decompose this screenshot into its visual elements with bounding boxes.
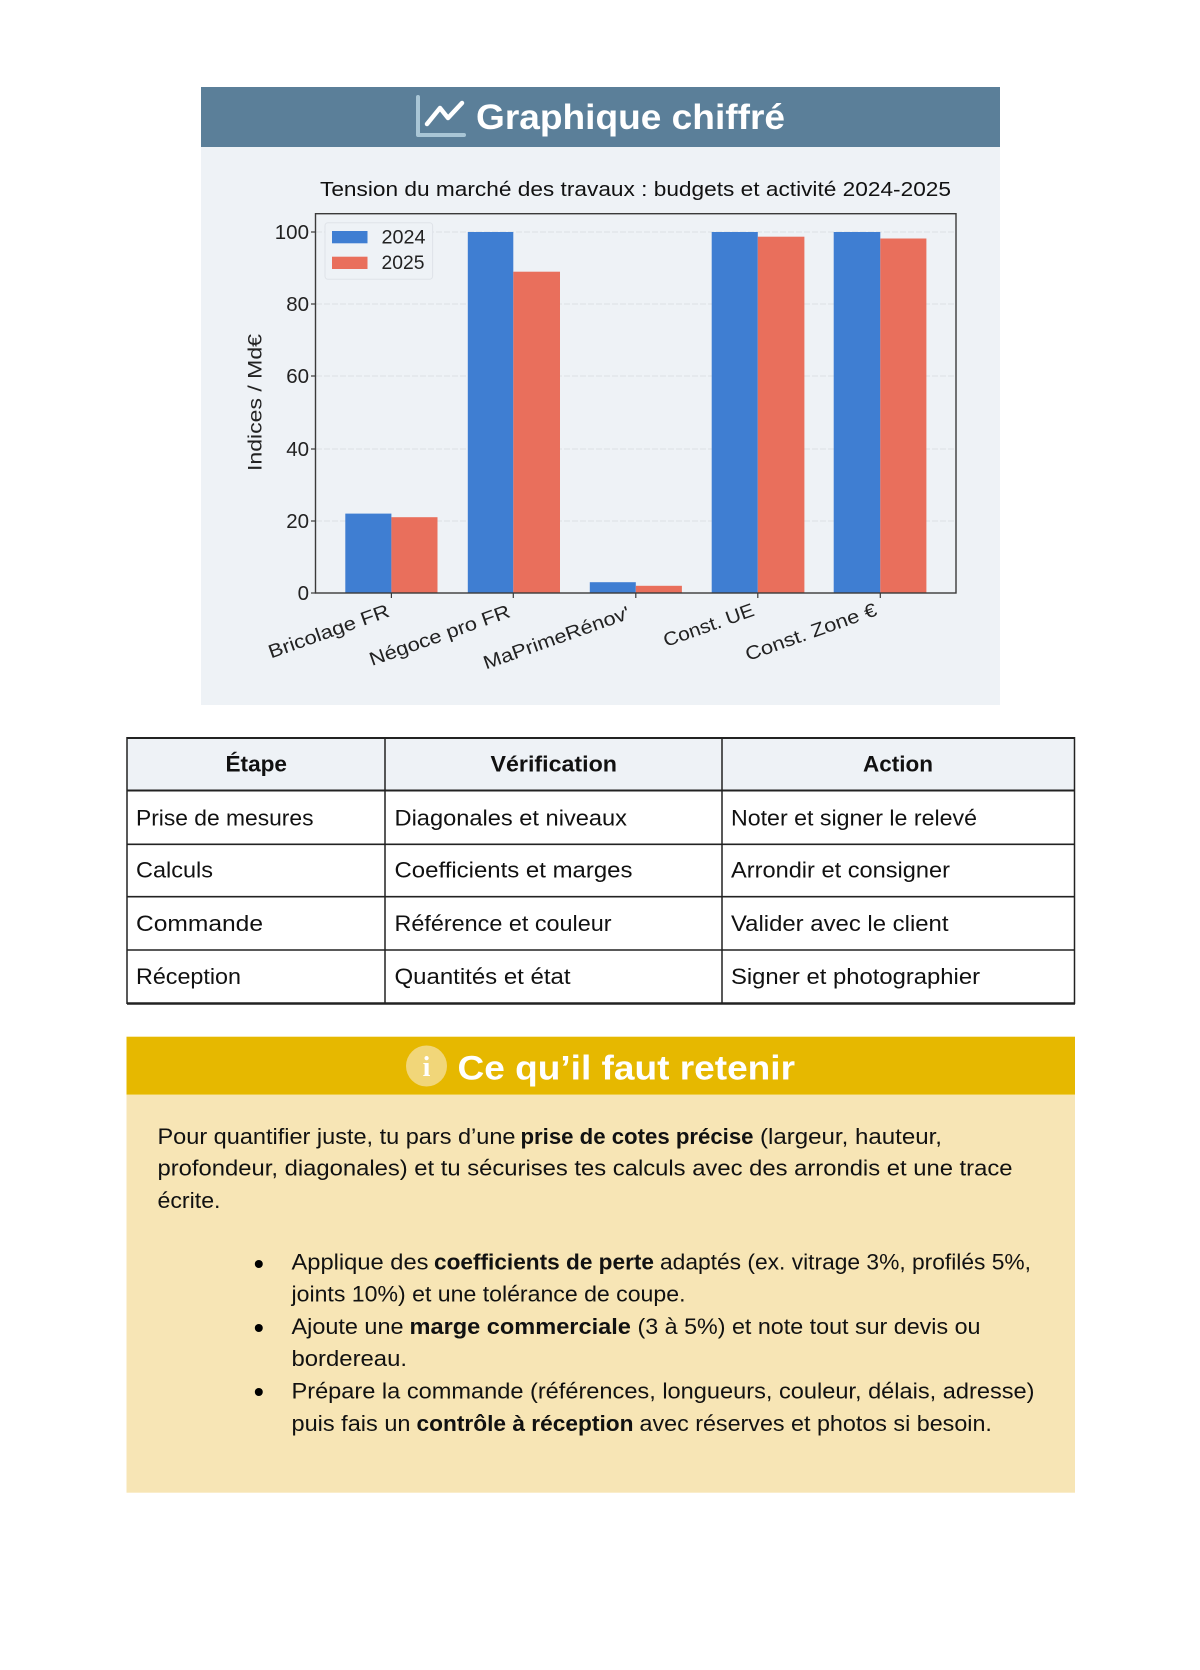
bullet: contrôle à réception: avec réserves et photos si besoin. [640, 1411, 992, 1436]
row: prise de mesures: Noter et signer le relevé [731, 806, 977, 830]
y axis tick labels [275, 221, 309, 605]
icon: info: i [423, 1052, 431, 1083]
table header row: Vérification [490, 752, 617, 776]
y axis tick labels: 60 [286, 365, 309, 388]
intro paragraph: profondeur, diagonales) et tu sécurises tes calculs avec des arrondis et une trace [158, 1156, 1012, 1180]
panel: graphique chiffré [201, 87, 1000, 705]
row: réception [136, 964, 980, 989]
y axis tick labels: 100 [275, 221, 309, 244]
y axis label: Indices / Md€ [246, 333, 266, 471]
x axis labels: Const. UE [661, 600, 757, 652]
row: réception: Réception [136, 964, 241, 989]
legend: 2024 [382, 228, 426, 248]
row: réception: Signer et photographier [731, 964, 980, 989]
x axis labels: Bricolage FR [266, 601, 392, 663]
row: commande: Commande [136, 911, 263, 936]
bullet: contrôle à réception: puis fais un [292, 1411, 410, 1436]
intro paragraph: Pour quantifier juste, tu pars d’une [158, 1124, 516, 1149]
chart title: Tension du marché des travaux : budgets et activité 2024-2025 [320, 178, 951, 201]
bullet: contrôle à réception: Prépare la commande (références, longueurs, couleur, délais, adresse) [292, 1378, 1034, 1404]
x axis labels [266, 600, 880, 674]
row: calculs: Arrondir et consigner [731, 858, 950, 882]
bars 2024 [345, 232, 880, 593]
y axis tick labels: 80 [286, 293, 309, 316]
row: commande: Valider avec le client [731, 911, 948, 936]
table header row: Étape [226, 752, 287, 776]
axes frame [316, 214, 956, 593]
panel: ce qu'il faut retenir [126, 1037, 1075, 1493]
row: calculs: Calculs [136, 858, 213, 882]
row: prise de mesures: Prise de mesures [136, 806, 314, 830]
bullet: coefficients de perte [255, 1250, 1031, 1306]
y axis tick labels: 40 [286, 438, 309, 461]
legend [325, 223, 433, 279]
table: étapes de vérification [127, 737, 1075, 1004]
intro paragraph [158, 1124, 1012, 1213]
bar chart [246, 214, 956, 674]
panel background [201, 147, 1000, 705]
bullet: marge commerciale: bordereau. [292, 1346, 407, 1371]
bullet: contrôle à réception: contrôle à réception [416, 1411, 634, 1436]
row: calculs [136, 858, 950, 882]
bullet: coefficients de perte: joints 10%) et une tolérance de coupe. [290, 1282, 686, 1306]
row: prise de mesures [136, 806, 977, 830]
x axis labels: Négoce pro FR [367, 602, 513, 671]
bullet: coefficients de perte: Applique des [292, 1250, 428, 1274]
table header row: Action [863, 752, 933, 776]
panel header [126, 1037, 1075, 1095]
intro paragraph: prise de cotes précise [520, 1124, 754, 1149]
panel background [126, 1095, 1075, 1493]
row: prise de mesures: Diagonales et niveaux [394, 806, 627, 830]
row: calculs: Coefficients et marges [394, 858, 632, 882]
bullet: contrôle à réception [255, 1378, 1034, 1436]
row: réception: Quantités et état [394, 964, 570, 989]
icon: line chart [418, 97, 464, 135]
table header row [128, 738, 1074, 790]
bullet: coefficients de perte: coefficients de perte [434, 1250, 654, 1274]
row: commande: Référence et couleur [394, 911, 612, 936]
panel header [201, 87, 1000, 147]
bullet: coefficients de perte: adaptés (ex. vitrage 3%, profilés 5%, [660, 1250, 1031, 1274]
legend: 2025 [382, 253, 424, 274]
x axis labels: MaPrimeRénov' [481, 603, 633, 674]
row: commande [136, 911, 948, 936]
bullet: marge commerciale: (3 à 5%) et note tout sur devis ou [638, 1314, 980, 1339]
bullet: marge commerciale: marge commerciale [410, 1314, 631, 1339]
bullet: marge commerciale [255, 1314, 980, 1371]
y axis tick labels: 20 [286, 510, 309, 533]
bars 2025 [391, 237, 926, 593]
bullet: marge commerciale: Ajoute une [292, 1314, 404, 1339]
intro paragraph: (largeur, hauteur, [760, 1124, 942, 1149]
intro paragraph: écrite. [158, 1188, 220, 1213]
icon: info [406, 1046, 447, 1086]
x axis labels: Const. Zone € [743, 600, 880, 666]
heading: Graphique chiffré [476, 98, 785, 137]
y axis tick labels: 0 [298, 582, 309, 605]
heading: Ce qu’il faut retenir [458, 1050, 795, 1088]
